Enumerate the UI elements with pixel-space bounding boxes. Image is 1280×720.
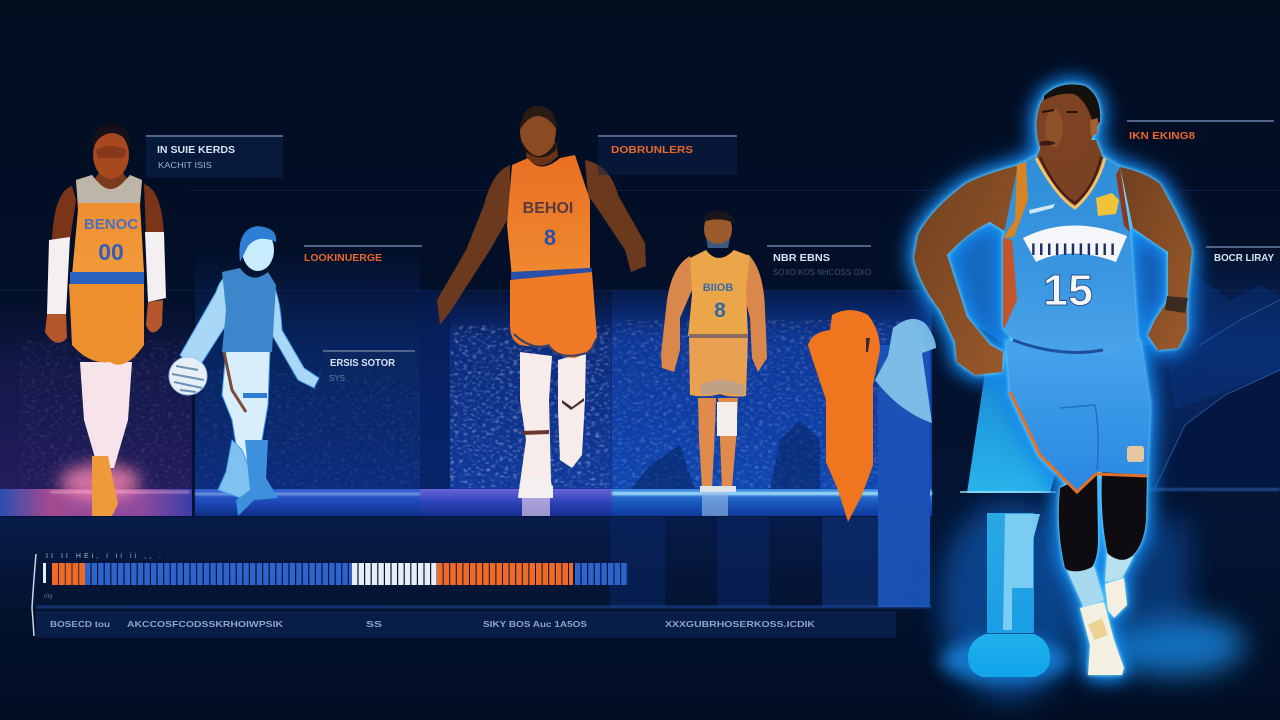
hero jersey lettering arc (1023, 225, 1127, 262)
label: right (1206, 246, 1280, 264)
floor reflections of players (522, 492, 728, 516)
timeline tick labels: II II HEi, i ii ii ,, . (46, 553, 161, 560)
player 3: large orange kit (437, 106, 646, 498)
footer strip (36, 606, 931, 638)
player 3: large orange kit: 8 (544, 225, 556, 250)
panel: lower floor columns (0, 517, 932, 607)
label: player four (767, 245, 871, 277)
label: player three: DOBRUNLERS (611, 144, 693, 156)
hero jersey patch (1096, 193, 1119, 216)
timeline segments (52, 563, 85, 585)
player 4: yellow-orange kit: 8 (714, 299, 726, 322)
label: player two (304, 245, 422, 264)
label: hero player: IKN EKING8 (1129, 130, 1195, 142)
label: ball handler (323, 350, 415, 383)
hero legs (1059, 470, 1147, 675)
hero jersey (1003, 156, 1138, 355)
hero wrist band (1165, 296, 1188, 313)
hero shorts logo (1127, 446, 1144, 462)
timeline bar chart (32, 553, 628, 636)
hero player: blue kit with glow (914, 84, 1192, 675)
scenery: dark rock shapes (630, 420, 820, 490)
label: player one: KACHIT ISIS (158, 161, 212, 170)
hero right arm (1120, 167, 1192, 350)
hero number: 15 (1043, 266, 1093, 315)
timeline left bracket (32, 554, 36, 636)
label: player four: SOXO KOS NHCOSS OXO (773, 268, 871, 277)
silhouette: orange player (808, 310, 880, 522)
jersey lettering: BENOC (84, 216, 138, 233)
texture: crowd grain (0, 315, 935, 495)
column: blue bar (878, 345, 930, 607)
player 1: orange kit (45, 124, 166, 516)
label: player one (146, 135, 283, 178)
panel: right dark rocks (1140, 270, 1280, 491)
footer strip: AKCCOSFCODSSKRHOIWPSIK (127, 619, 284, 629)
hero neck and head (1036, 84, 1105, 208)
right backdrop behind hero arms (948, 222, 1170, 345)
footer strip: SS (366, 619, 382, 629)
player 1: orange kit: 00 (98, 239, 124, 265)
silhouette: light blue (875, 319, 936, 423)
footer strip: BOSECD tou (50, 619, 110, 629)
hero player: blue kit with glow: IIIIIIIIIII (1031, 240, 1115, 259)
jersey lettering: BIIOB (703, 282, 733, 294)
label: player three (598, 135, 737, 175)
hero left arm (914, 165, 1020, 375)
floor glow band (0, 464, 932, 516)
ball (169, 357, 207, 395)
player 4: yellow-orange kit (661, 211, 767, 492)
panel: backdrop columns (0, 190, 1280, 490)
label: ball handler: ERSIS SOTOR (330, 357, 395, 369)
label: player two: LOOKINUERGE (304, 252, 382, 264)
jersey lettering: BEHOI (523, 200, 573, 217)
hero shorts (1006, 340, 1150, 492)
label: right: BOCR LIRAY (1214, 252, 1274, 264)
footer strip: SIKY BOS Auc 1A5OS (483, 619, 587, 629)
timeline bar chart: r/ry (44, 594, 53, 600)
label: ball handler: SYS (329, 374, 345, 383)
label: player one: IN SUIE KERDS (157, 144, 235, 156)
label: player four: NBR EBNS (773, 252, 830, 264)
footer strip: XXXGUBRHOSERKOSS.ICDIK (665, 619, 816, 629)
right pillars: cyan silhouette (940, 373, 1245, 700)
player 2: light blue outline (169, 226, 319, 516)
